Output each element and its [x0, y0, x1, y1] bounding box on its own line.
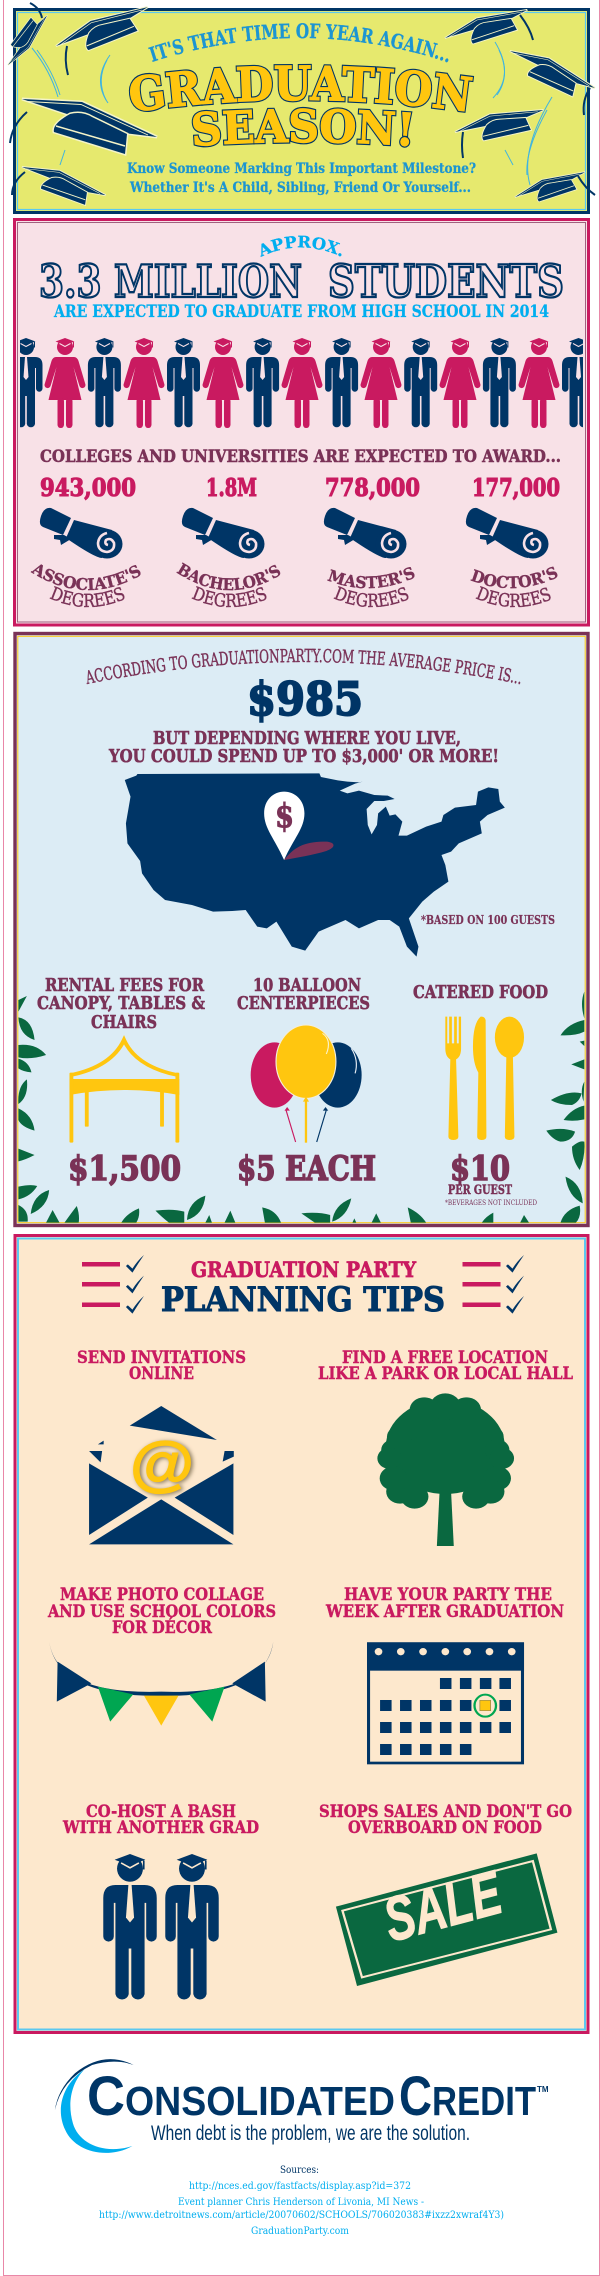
degree numbers: 177,000	[472, 473, 560, 502]
leaves border	[18, 992, 584, 1223]
column: balloons: CENTERPIECES	[237, 993, 370, 1014]
degree numbers	[40, 473, 560, 502]
sources: GraduationParty.com	[251, 2226, 349, 2237]
heading: planning tips: PLANNING TIPS	[161, 1280, 445, 1320]
graduation caps	[0, 0, 598, 221]
approx label: APPROX.	[260, 236, 342, 257]
map: united states	[125, 773, 505, 957]
pin shadow	[284, 842, 334, 860]
tip: send invitations	[77, 1348, 246, 1544]
icon: sale sign: SALE	[377, 1858, 510, 1956]
icons: diplomas	[40, 508, 548, 558]
map pin	[264, 792, 304, 860]
icon row: graduates	[10, 338, 595, 428]
icon: sale sign	[336, 1853, 557, 1986]
column: catered food: PER GUEST	[448, 1183, 512, 1198]
subheading: Know Someone Marking This Important Milestone?	[127, 161, 476, 177]
tip: send invitations: ONLINE	[129, 1364, 194, 1384]
degree labels: MASTER'S	[327, 567, 415, 588]
panel: graduation season header	[8, 2, 596, 214]
tip: party week: WEEK AFTER GRADUATION	[325, 1602, 564, 1622]
subheading: Whether It's A Child, Sibling, Friend Or Yourself...	[129, 180, 471, 196]
degree labels: ASSOCIATE'S	[30, 564, 141, 590]
tip: co-host: CO-HOST A BASH	[86, 1802, 236, 1822]
icon: checklists	[82, 1255, 524, 1314]
headline number: 3.3 MILLION	[39, 255, 302, 308]
degree labels: DOCTOR'S	[470, 566, 558, 588]
footnote: guests: *BASED ON 100 GUESTS	[421, 913, 555, 927]
text: colleges award: COLLEGES AND UNIVERSITIES ARE EXPECTED TO AWARD...	[40, 447, 561, 466]
tip: send invitations: SEND INVITATIONS	[77, 1348, 246, 1368]
column: canopy	[37, 975, 205, 1189]
sources: http://www.detroitnews.com/article/20070602/SCHOOLS/706020383#ixzz2xwraf4Y3)	[99, 2210, 504, 2221]
column: catered food	[413, 982, 548, 1207]
logo tagline: When debt is the problem, we are the solution.	[151, 2122, 470, 2145]
column: catered food: $10	[450, 1149, 510, 1189]
degree numbers: 778,000	[325, 473, 420, 502]
column: canopy: CANOPY, TABLES &	[37, 993, 205, 1014]
icon: envelope	[89, 1406, 234, 1544]
column: canopy: CHAIRS	[91, 1012, 157, 1033]
logo wordmark: TM	[537, 2085, 549, 2094]
tip: free location	[318, 1348, 573, 1546]
panel: planning tips	[15, 1236, 588, 2032]
sources	[99, 2165, 504, 2237]
icon: at sign: @	[130, 1430, 194, 1497]
tip: shop sales	[319, 1802, 572, 1986]
sources: http://nces.ed.gov/fastfacts/display.asp?id=372	[189, 2181, 411, 2192]
sources: Event planner Chris Henderson of Livonia, MI News -	[178, 2197, 424, 2208]
average price: $985	[247, 672, 363, 726]
tip: photo collage: MAKE PHOTO COLLAGE	[60, 1585, 264, 1605]
logo wordmark: C	[87, 2064, 125, 2127]
tip: photo collage	[47, 1585, 276, 1726]
degree labels: DEGREES	[192, 586, 266, 608]
icon: two graduates	[103, 1854, 219, 2000]
tip: co-host: WITH ANOTHER GRAD	[62, 1818, 259, 1838]
headline number	[39, 255, 564, 308]
logo wordmark: C	[399, 2064, 432, 2127]
title: graduation season: SEASON!	[192, 108, 412, 147]
heading: graduation party: GRADUATION PARTY	[191, 1257, 417, 1282]
column: canopy: $1,500	[68, 1149, 181, 1189]
logo wordmark: ONSOLIDATED	[125, 2078, 395, 2124]
icon: calendar	[367, 1642, 524, 1763]
icon: tree	[377, 1393, 514, 1546]
logo swoosh	[55, 2059, 134, 2153]
tip: party week: HAVE YOUR PARTY THE	[344, 1585, 552, 1605]
column: balloons: $5 EACH	[237, 1149, 376, 1189]
text: depending where you live: YOU COULD SPEND UP TO $3,000' OR MORE!	[108, 746, 499, 767]
icon: canopy tent	[69, 1040, 179, 1143]
logo: consolidated credit	[55, 2059, 549, 2153]
column: balloons	[237, 975, 376, 1189]
title: graduation season: GRADUATION	[128, 64, 474, 113]
tip: free location: FIND A FREE LOCATION	[342, 1348, 548, 1368]
title: graduation season	[128, 64, 474, 148]
sources: Sources:	[280, 2165, 319, 2176]
degree labels	[30, 562, 558, 608]
icon: balloons	[251, 1025, 362, 1143]
tip: co-host	[62, 1802, 259, 2000]
icon: cutlery	[445, 1017, 524, 1140]
icon: bunting	[49, 1642, 273, 1726]
degree labels: DEGREES	[334, 586, 408, 608]
column: catered food: CATERED FOOD	[413, 982, 548, 1003]
panel: 3.3 million students	[13, 218, 590, 626]
degree numbers: 1.8M	[206, 473, 257, 502]
title: graduation season: GRADUATION	[130, 65, 473, 112]
panel: party price	[13, 632, 590, 1228]
heading: it's that time of year again: IT'S THAT TIME OF YEAR AGAIN...	[148, 23, 448, 62]
title: graduation season: SEASON!	[192, 106, 412, 148]
tip: shop sales: OVERBOARD ON FOOD	[348, 1818, 542, 1838]
logo wordmark: REDIT	[432, 2078, 536, 2124]
tip: party week	[325, 1585, 564, 1763]
column: catered food: *BEVERAGES NOT INCLUDED	[445, 1198, 537, 1207]
degree labels: DEGREES	[50, 586, 124, 608]
column: canopy: RENTAL FEES FOR	[45, 975, 205, 996]
degree labels: DEGREES	[476, 586, 551, 608]
subheading	[127, 161, 476, 196]
text: according to: ACCORDING TO GRADUATIONPARTY.COM THE AVERAGE PRICE IS...	[86, 648, 520, 684]
degree labels: BACHELOR'S	[176, 562, 280, 590]
text: depending where you live: BUT DEPENDING WHERE YOU LIVE,	[153, 728, 461, 749]
motion streaks	[32, 42, 552, 185]
column: balloons: 10 BALLOON	[253, 975, 361, 996]
tip: photo collage: AND USE SCHOOL COLORS	[47, 1602, 276, 1622]
tip: photo collage: FOR DÉCOR	[112, 1617, 213, 1638]
degree numbers: 943,000	[40, 473, 136, 502]
pin dollar sign: $	[275, 796, 294, 835]
text: depending where you live	[108, 728, 499, 767]
logo wordmark	[87, 2064, 549, 2127]
